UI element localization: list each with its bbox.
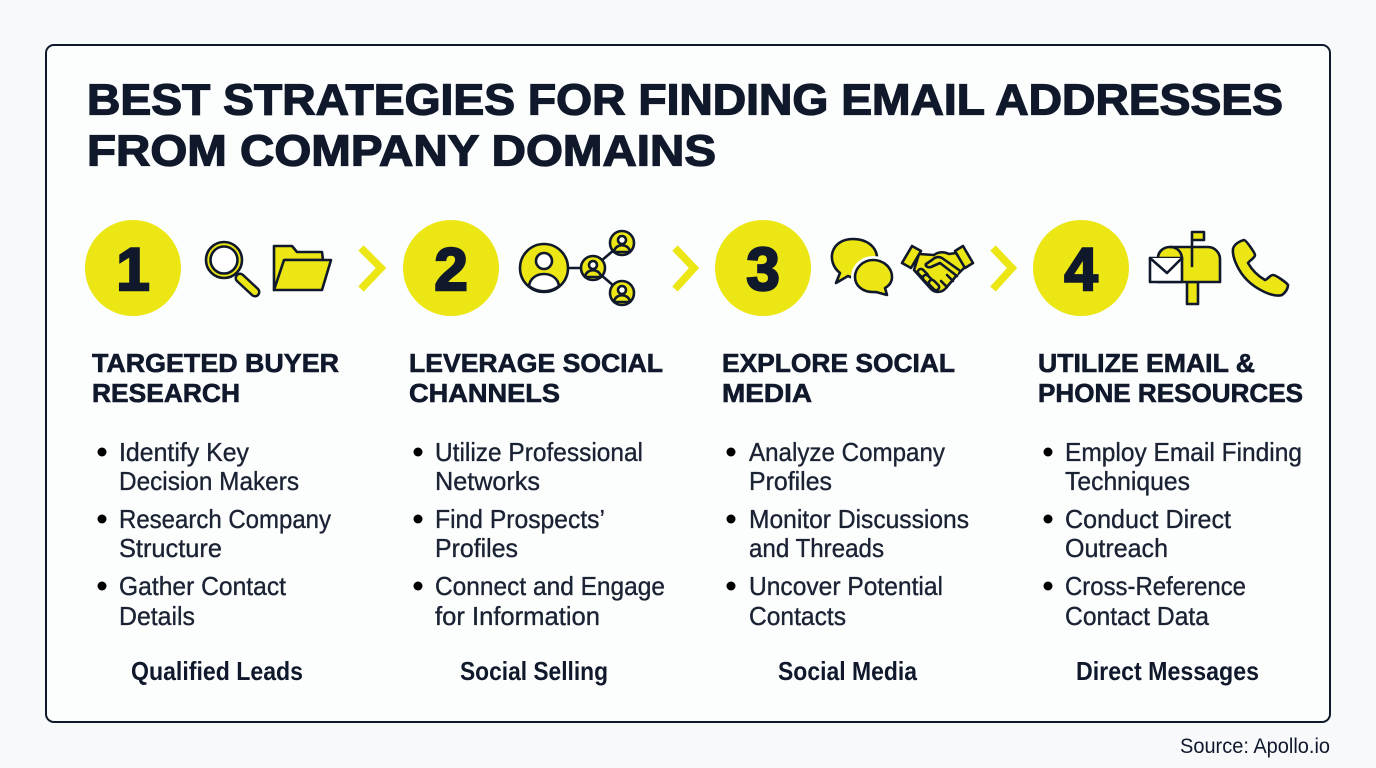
heading 3: EXPLORE SOCIAL — [722, 350, 955, 378]
heading 2: CHANNELS — [409, 380, 560, 408]
label 3: Social Media — [778, 656, 917, 686]
bullet list 2: Networks — [435, 466, 540, 496]
bullet list 2: Connect and Engage — [435, 571, 665, 601]
number badge 1 — [85, 220, 181, 316]
bullet list 4: Cross-Reference — [1065, 571, 1246, 601]
bullet list 4: Conduct Direct — [1065, 504, 1232, 534]
bullet list 4: Outreach — [1065, 533, 1168, 563]
number badge 1: 1 — [116, 236, 150, 303]
label 4: Direct Messages — [1076, 656, 1259, 686]
number badge 3: 3 — [746, 236, 780, 303]
heading 3: MEDIA — [722, 380, 812, 408]
label 2: Social Selling — [460, 656, 608, 686]
bullet list 3: Uncover Potential — [749, 571, 943, 601]
bullet list 3: Monitor Discussions — [749, 504, 969, 534]
heading 3 — [722, 350, 955, 408]
icon: magnifying glass — [206, 242, 255, 292]
step 1 column — [85, 220, 381, 686]
heading 1 — [92, 350, 339, 408]
bullet list 3: Contacts — [749, 601, 846, 631]
bullet list 4: Employ Email Finding — [1065, 437, 1302, 467]
heading 1: TARGETED BUYER — [92, 350, 339, 378]
bullet list 2: Utilize Professional — [435, 437, 643, 467]
icon: mailbox with envelope — [1150, 232, 1220, 304]
number badge 2 — [403, 220, 499, 316]
bullet list 1 — [98, 437, 331, 631]
number badge 2: 2 — [434, 236, 468, 303]
step 4 column — [1033, 220, 1303, 686]
number badge 4 — [1033, 220, 1129, 316]
icon: telephone — [1233, 240, 1288, 296]
arrow 2 — [675, 248, 694, 289]
bullet list 3: Analyze Company — [749, 437, 945, 467]
bullet list 1: Research Company — [119, 504, 331, 534]
bullet list 1: Identify Key — [119, 437, 249, 467]
heading 2 — [409, 350, 663, 408]
bullet list 3: and Threads — [749, 533, 884, 563]
bullet list 1: Gather Contact — [119, 571, 287, 601]
number badge 3 — [715, 220, 811, 316]
icon: speech bubbles — [832, 239, 892, 295]
bullet list 2: Find Prospects’ — [435, 504, 605, 534]
title: BEST STRATEGIES FOR FINDING EMAIL ADDRESSES — [87, 76, 1283, 124]
step 3 column — [715, 220, 1012, 686]
bullet list 1: Structure — [119, 533, 222, 563]
bullet list 2 — [414, 437, 665, 631]
arrow 1 — [361, 248, 381, 289]
label 1: Qualified Leads — [131, 656, 303, 686]
title — [87, 76, 1283, 176]
bullet list 3 — [726, 437, 969, 631]
bullet list 1: Details — [119, 601, 195, 631]
bullet list 2: Profiles — [435, 533, 518, 563]
step 2 column — [403, 220, 694, 686]
heading 4: UTILIZE EMAIL & — [1038, 350, 1255, 378]
bullet list 4: Contact Data — [1065, 601, 1210, 631]
heading 1: RESEARCH — [92, 380, 240, 408]
bullet list 4: Techniques — [1065, 466, 1190, 496]
icon: social network — [520, 231, 634, 305]
icon: folder — [274, 246, 331, 290]
bullet list 2: for Information — [435, 601, 600, 631]
arrow 3 — [993, 248, 1012, 289]
bullet list 3: Profiles — [749, 466, 832, 496]
bullet list 1: Decision Makers — [119, 466, 299, 496]
title: FROM COMPANY DOMAINS — [87, 126, 716, 176]
source note: Source: Apollo.io — [1180, 735, 1330, 758]
bullet list 4 — [1044, 437, 1302, 631]
number badge 4: 4 — [1064, 236, 1098, 303]
heading 2: LEVERAGE SOCIAL — [409, 350, 663, 378]
heading 4 — [1038, 350, 1303, 408]
icon: handshake — [902, 246, 973, 292]
heading 4: PHONE RESOURCES — [1038, 380, 1303, 408]
